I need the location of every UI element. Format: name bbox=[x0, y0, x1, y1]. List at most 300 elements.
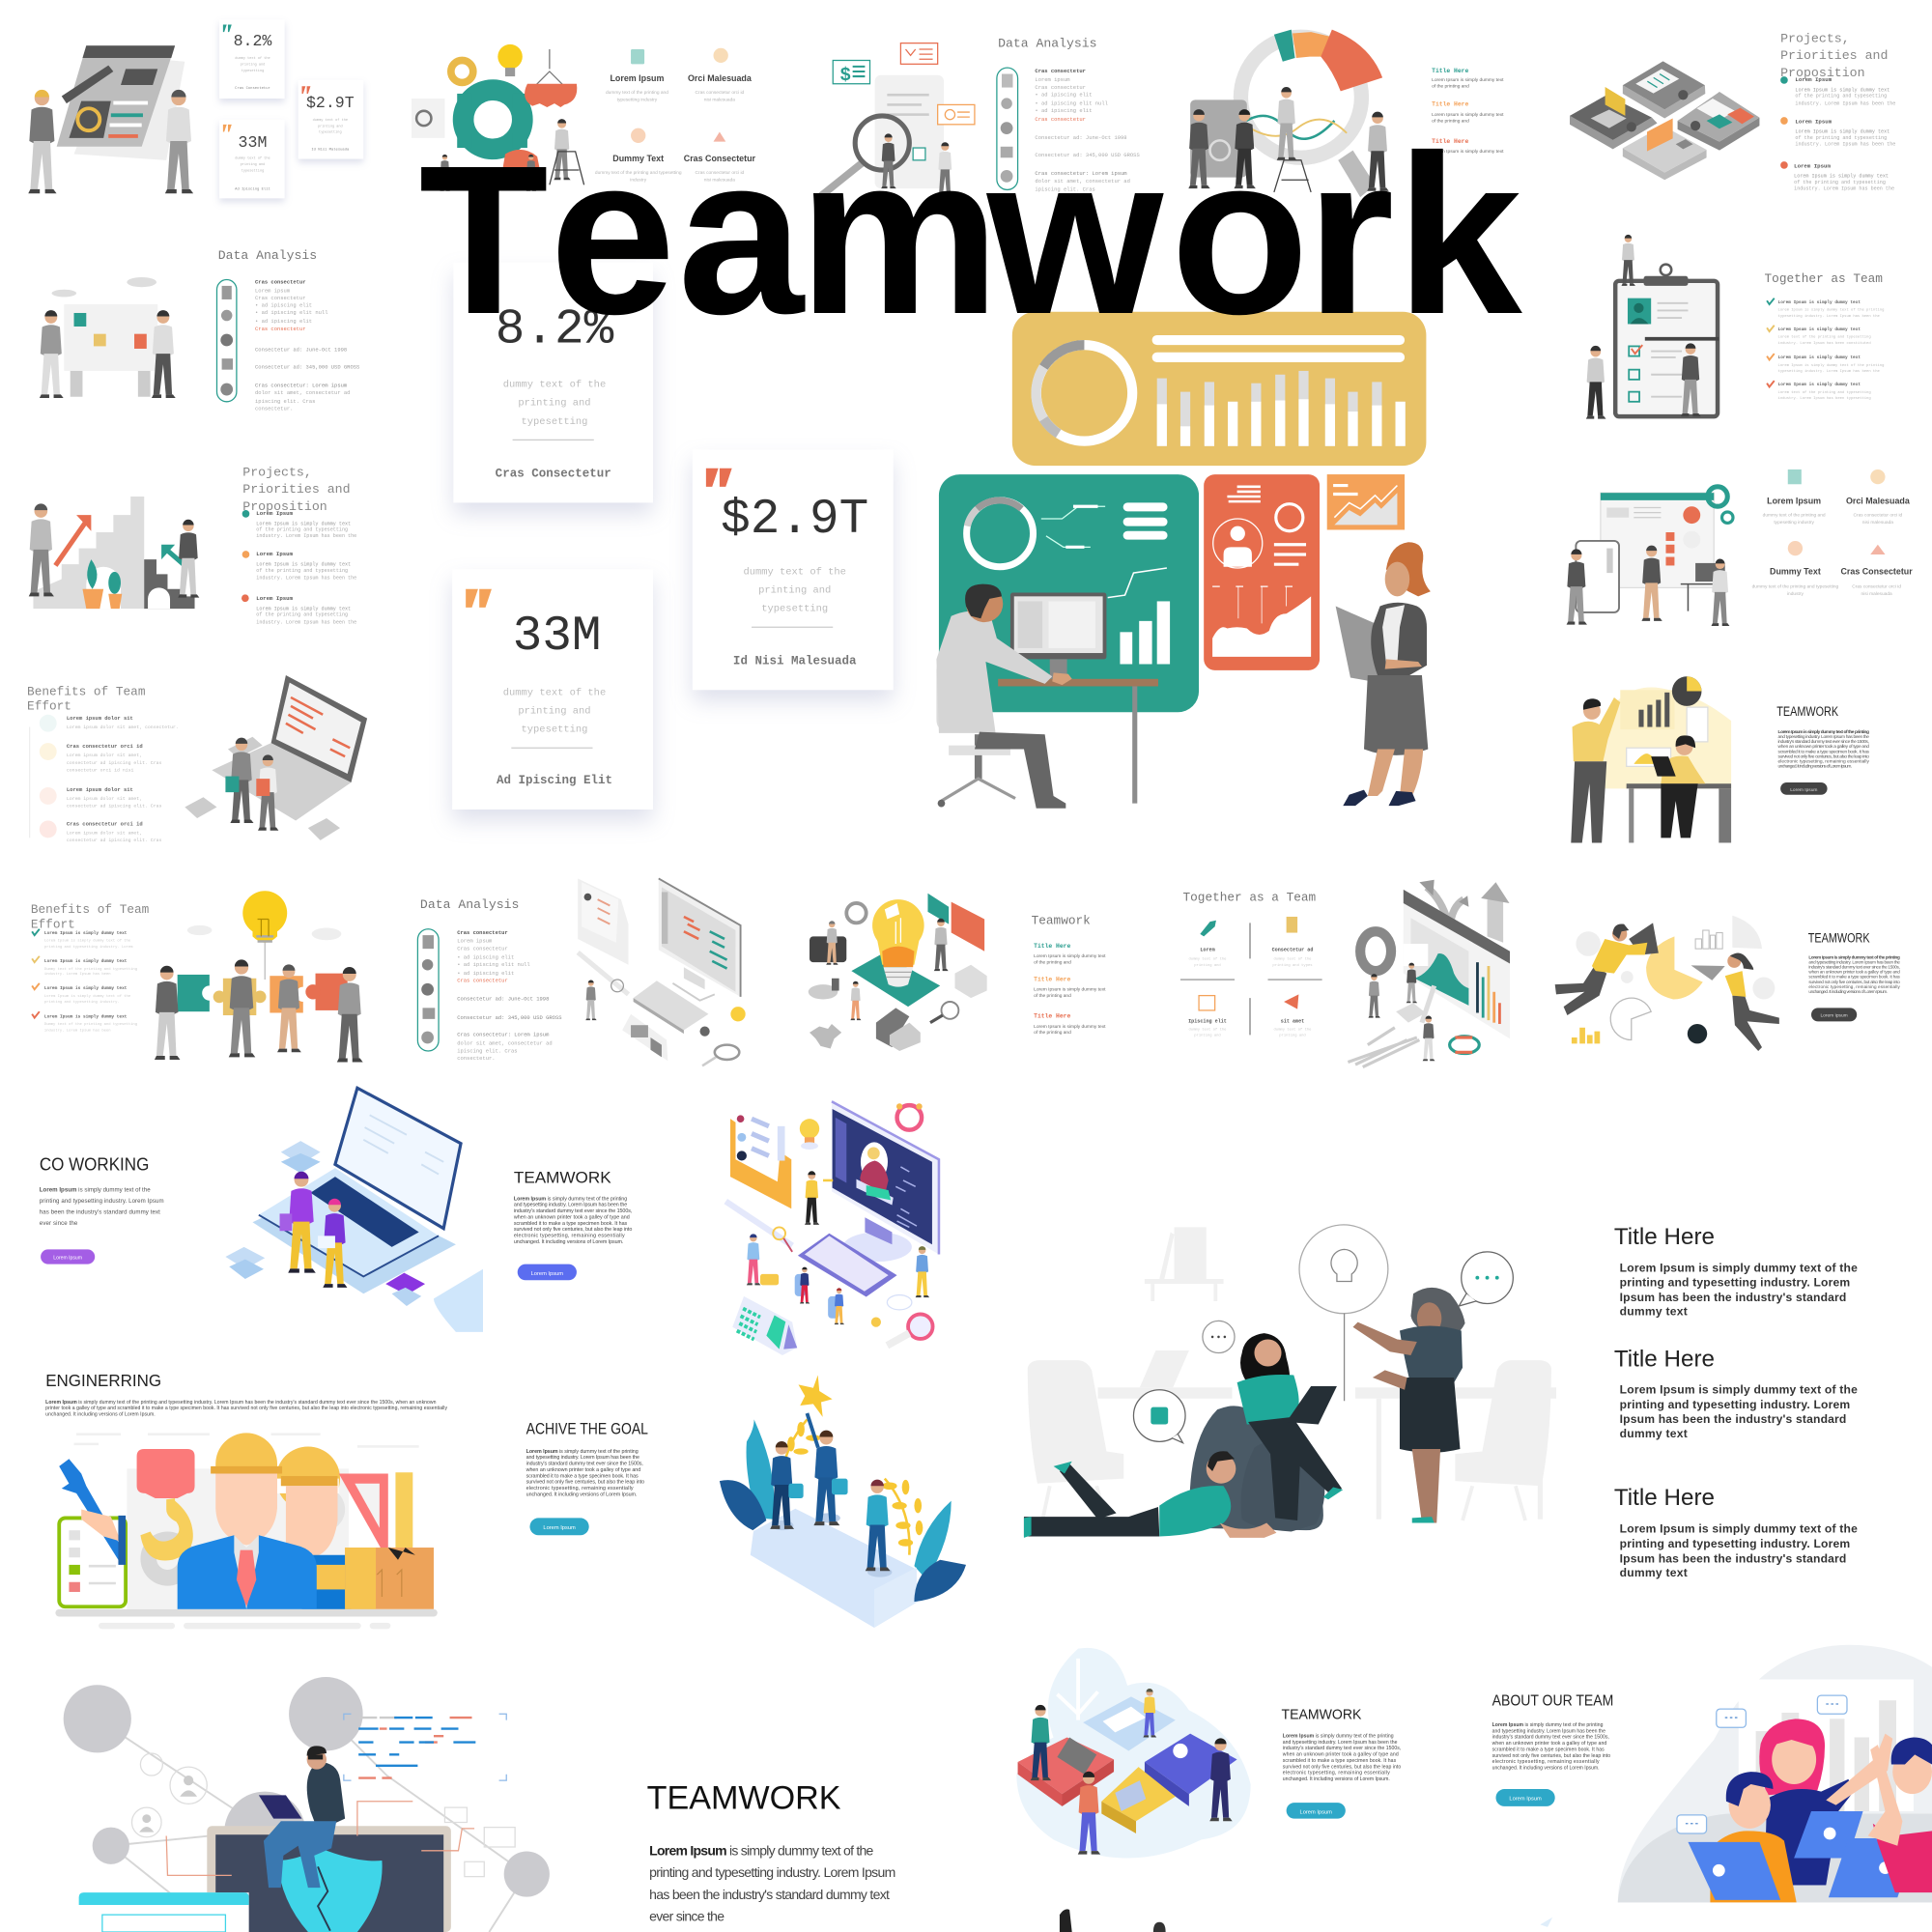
text block: when an unknown printer took a galley of type and bbox=[1778, 744, 1869, 750]
quadrant grid: Consectetur ad bbox=[1272, 948, 1313, 953]
text list bbox=[1035, 68, 1140, 193]
text list: Cras consectetur bbox=[457, 945, 508, 952]
body text: scrambled it to make a type specimen book. It has bbox=[1283, 1758, 1397, 1764]
feature icons and labels: dummy text of the printing and bbox=[606, 90, 668, 96]
feature icons and labels: Cras consectetur orci id bbox=[696, 170, 745, 176]
bottom edge figure fragments bbox=[1060, 1909, 1552, 1932]
note 2: Ipsum has been the industry's standard bbox=[1620, 1412, 1846, 1426]
text block: industry's standard dummy text ever since the 1500s, bbox=[1778, 739, 1869, 745]
body text: electronic typesetting, remaining essentially bbox=[1492, 1759, 1600, 1765]
text block: electronic typesetting, remaining essentially bbox=[1778, 759, 1870, 765]
heading: ACHIVE THE GOAL bbox=[526, 1420, 648, 1438]
figure: woman standing bbox=[1353, 1288, 1465, 1523]
three titled notes: Lorem Ipsum is simply dummy text bbox=[1432, 112, 1504, 118]
button bbox=[1780, 782, 1828, 795]
text block: Lorem Ipsum is simply dummy text of the printing bbox=[1808, 954, 1900, 959]
body text bbox=[1492, 1722, 1610, 1772]
body text: industry's standard dummy text ever since the 1500s, bbox=[1283, 1746, 1401, 1751]
bullets: Lorem Ipsum bbox=[1794, 162, 1831, 169]
figure: woman on beanbag bbox=[1189, 1333, 1343, 1531]
mini card $2.9T: $2.9T bbox=[306, 94, 355, 112]
panel: Achive the goal slide bbox=[526, 1420, 648, 1535]
note 1: Lorem Ipsum is simply dummy text of the bbox=[1620, 1261, 1858, 1274]
note 2 bbox=[1614, 1347, 1858, 1440]
checklist: Lorem text of the printing and typesetting bbox=[1778, 390, 1871, 395]
text block bbox=[1776, 704, 1870, 770]
illustration: puzzle team and bulb bbox=[155, 891, 363, 1062]
heading: TEAMWORK bbox=[1282, 1707, 1362, 1722]
panel: orange dashboard bbox=[1204, 474, 1320, 670]
value: 33M bbox=[513, 610, 601, 665]
checklist: typesetting industry. Lorem Ipsum has been the bbox=[1778, 369, 1881, 374]
title: Teamwork bbox=[419, 108, 1522, 361]
body text bbox=[649, 1842, 895, 1924]
heading: Proposition bbox=[242, 499, 327, 514]
value: 8.2% bbox=[496, 303, 614, 358]
description: typesetting bbox=[522, 724, 587, 736]
illustration: gears and bulb bbox=[412, 44, 584, 191]
heading: Data Analysis bbox=[420, 897, 519, 912]
mini card 33M: printing and bbox=[241, 162, 265, 167]
text block: Title Here bbox=[1034, 943, 1070, 950]
body text bbox=[513, 1196, 632, 1245]
body text: industry's standard dummy text ever since the 1500s, bbox=[526, 1462, 643, 1467]
item list: consectetur ad ipiscing elit. Cras bbox=[67, 760, 161, 766]
panel: main stat card $2.9T bbox=[693, 450, 894, 690]
checklist: industry. Lorem Ipsum has been constituted bbox=[1778, 341, 1871, 346]
illustration: engineers bbox=[55, 1433, 438, 1629]
checklist: Lorem Ipsum is simply dummy text of the printing bbox=[1778, 363, 1884, 368]
feature icons and labels: Cras Consectetur bbox=[684, 154, 756, 163]
panel: small orange chart bbox=[1327, 474, 1405, 529]
text list: • ad ipiscing elit null bbox=[1035, 99, 1108, 106]
item list: Cras consectetur orci id bbox=[67, 743, 143, 750]
quadrant grid bbox=[1180, 917, 1322, 1038]
panel: donut slide bbox=[1188, 30, 1504, 197]
text list: • ad ipiscing elit bbox=[457, 953, 514, 960]
illustration: flying people and charts bbox=[1555, 916, 1779, 1051]
text list: consectetur. bbox=[255, 406, 293, 412]
text list: • ad ipiscing elit bbox=[1035, 91, 1093, 98]
body text: electronic typesetting, remaining essentially bbox=[514, 1234, 625, 1239]
three titled notes: Lorem Ipsum is simply dummy text bbox=[1432, 77, 1504, 83]
feature icons and labels: Cras consectetur orci id bbox=[1852, 583, 1901, 589]
text list: Consectetur ad: June-Oct 1998 bbox=[457, 996, 549, 1003]
checklist: Lorem Ipsum is simply dummy text bbox=[44, 958, 128, 964]
note 3: dummy text bbox=[1620, 1566, 1688, 1579]
mini card 33M: typesetting bbox=[242, 168, 264, 173]
bullets bbox=[1780, 76, 1895, 191]
illustration: isometric laptop with people bbox=[225, 1088, 483, 1332]
quadrant grid: printing and bbox=[1279, 1034, 1306, 1038]
panel: Title Here text blocks bbox=[1614, 1224, 1858, 1579]
note 2: Lorem Ipsum is simply dummy text of the bbox=[1620, 1383, 1858, 1397]
mini card $2.9T: printing and bbox=[318, 124, 343, 128]
description: printing and bbox=[518, 398, 591, 410]
text list: Cras consectetur: Lorem ipsum bbox=[457, 1032, 549, 1038]
text block: survived not only five centuries, but also the leap into bbox=[1778, 753, 1869, 759]
illustration: man and woman at desk bbox=[1571, 676, 1731, 842]
body text: has been the industry's standard dummy text bbox=[649, 1887, 890, 1902]
speech bubble: small bbox=[1203, 1321, 1235, 1353]
bullets: Lorem Ipsum is simply dummy text bbox=[1795, 129, 1889, 135]
heading: Priorities and bbox=[1780, 48, 1888, 63]
body text: printing and typesetting industry. Lorem Ipsum bbox=[40, 1198, 164, 1205]
heading: Projects, bbox=[242, 465, 312, 479]
text block: Lorem Ipsum is simply dummy text of the printing bbox=[1778, 729, 1869, 735]
checklist: Lorem Ipsum is simply dummy text bbox=[44, 1014, 128, 1020]
speech bubble: right bbox=[1459, 1252, 1513, 1306]
heading: Together as a Team bbox=[1182, 890, 1316, 904]
checklist: Lorem Ipsum is simply dummy text bbox=[1778, 327, 1861, 332]
illustration: network and shield bbox=[64, 1677, 550, 1932]
text list: consectetur. bbox=[457, 1055, 496, 1062]
illustration: isometric laptop bbox=[185, 675, 367, 840]
feature icons and labels: Lorem Ipsum bbox=[1767, 497, 1821, 506]
feature icons and labels bbox=[1752, 469, 1913, 597]
description bbox=[503, 687, 606, 736]
bullets: of the printing and typesetting bbox=[1794, 180, 1886, 185]
item list: consectetur ad ipiscing elit. Cras bbox=[67, 838, 161, 843]
attribution: Id Nisi Malesuada bbox=[733, 654, 857, 668]
note 3: printing and typesetting industry. Lorem bbox=[1620, 1537, 1850, 1550]
body text: and typesetting industry. Lorem Ipsum has been the bbox=[526, 1455, 639, 1461]
panel: yellow teamwork slide bbox=[1571, 676, 1870, 842]
feature icons and labels: industry bbox=[1787, 591, 1804, 597]
bullets: industry. Lorem Ipsum has been the bbox=[1795, 100, 1895, 106]
body text: scrambled it to make a type specimen book. It has bbox=[1492, 1747, 1605, 1752]
text list: Cras consectetur: Lorem ipsum bbox=[255, 383, 347, 389]
body text: has been the industry's standard dummy text bbox=[40, 1208, 160, 1215]
checklist: Lorem Ipsum is simply dummy text of the bbox=[44, 994, 131, 999]
bullets: Lorem Ipsum bbox=[1795, 76, 1833, 83]
heading: Benefits of Team bbox=[27, 684, 145, 698]
heading: Benefits of Team bbox=[31, 902, 149, 917]
description: typesetting bbox=[522, 416, 587, 428]
mini card 33M: dummy text of the bbox=[235, 156, 270, 161]
body text: when an unknown printer took a galley of type and bbox=[526, 1467, 640, 1473]
button: Lorem Ipsum bbox=[531, 1271, 563, 1277]
text block: of the printing and bbox=[1034, 959, 1071, 965]
text list: dolor sit amet, consectetur ad bbox=[1035, 178, 1130, 185]
button: Lorem Ipsum bbox=[1790, 787, 1817, 793]
quadrant grid: dummy text of the bbox=[1189, 1027, 1227, 1032]
text block: Lorem Ipsum is simply dummy text bbox=[1034, 953, 1106, 959]
text block bbox=[1808, 931, 1901, 994]
item list: Lorem ipsum dolor sit bbox=[67, 715, 133, 722]
text block: and typesetting industry. Lorem Ipsum has been the bbox=[1808, 959, 1900, 964]
attribution: Ad Ipiscing Elit bbox=[497, 774, 612, 787]
text list: Cras consectetur bbox=[255, 278, 306, 285]
text block: Title Here bbox=[1034, 1013, 1070, 1020]
body text bbox=[1283, 1733, 1401, 1782]
heading: Together as Team bbox=[1765, 271, 1883, 286]
note 3: Ipsum has been the industry's standard bbox=[1620, 1551, 1846, 1565]
description: printing and bbox=[758, 585, 831, 597]
text list: Cras consectetur bbox=[1035, 68, 1086, 74]
feature icons and labels: nisi malesuada bbox=[1862, 520, 1893, 526]
body text: Lorem Ipsum is simply dummy text of the printing and typesetting industry. Lorem Ipsum has been the industry's standard dummy text ever since the 1500s, when an unknown bbox=[45, 1400, 437, 1406]
text list: Consectetur ad: 345,000 USD GROSS bbox=[457, 1014, 562, 1021]
body text: unchanged. It including versions of Lorem Ipsum. bbox=[526, 1492, 637, 1497]
checklist: industry. Lorem Ipsum has been bbox=[44, 972, 111, 977]
feature icons and labels: Cras consectetur orci id bbox=[1854, 512, 1903, 518]
item list: Cras consectetur orci id bbox=[67, 821, 143, 828]
body text: survived not only five centuries, but also the leap into bbox=[526, 1480, 644, 1486]
panel: product slide (right) bbox=[1567, 469, 1913, 626]
illustration: team at board bbox=[40, 277, 176, 398]
text list: Lorem ipsum bbox=[1035, 76, 1070, 83]
checklist: Lorem Ipsum is simply dummy text bbox=[1778, 355, 1861, 360]
panel: clipboard slide bbox=[1586, 235, 1884, 419]
bullets: Lorem Ipsum is simply dummy text bbox=[1795, 87, 1889, 93]
mini card 8.2%: 8.2% bbox=[234, 32, 271, 50]
panel: gears slide bbox=[412, 44, 756, 191]
text block: TEAMWORK bbox=[1776, 704, 1838, 719]
central dashboard illustration bbox=[936, 312, 1431, 809]
text list: Consectetur ad: June-Oct 1998 bbox=[1035, 134, 1127, 141]
mini card $2.9T: dummy text of the bbox=[313, 118, 348, 123]
button: Lorem Ipsum bbox=[53, 1256, 82, 1262]
body text: electronic typesetting, remaining essentially bbox=[526, 1486, 634, 1492]
checklist: printing and typesetting industry. Lorem bbox=[44, 945, 133, 950]
illustration: document and magnifier: $ bbox=[840, 65, 851, 85]
bullets: Lorem Ipsum bbox=[256, 551, 294, 557]
body text: when an unknown printer took a galley of type and bbox=[513, 1214, 630, 1220]
button: Lorem Ipsum bbox=[1300, 1810, 1332, 1816]
text block: of the printing and bbox=[1034, 1030, 1071, 1036]
feature icons and labels: Cras Consectetur bbox=[1840, 566, 1913, 576]
illustration: team reaching star bbox=[720, 1375, 966, 1628]
panel: Together as a Team slide bbox=[1180, 880, 1510, 1067]
card background bbox=[693, 450, 894, 690]
quadrant grid: sit amet bbox=[1281, 1019, 1304, 1025]
text list: Cras consectetur bbox=[457, 929, 508, 936]
capsule icon strip bbox=[997, 68, 1018, 189]
illustration: web window and team bbox=[1567, 487, 1733, 626]
item list bbox=[30, 715, 179, 843]
quadrant grid: dummy text of the bbox=[1189, 957, 1227, 962]
bullets: of the printing and typesetting bbox=[256, 568, 348, 574]
text block: TEAMWORK bbox=[1808, 931, 1870, 946]
feature icons and labels: nisi malesuada bbox=[1861, 591, 1892, 597]
standing woman figure bbox=[1336, 542, 1431, 806]
button: Lorem Ipsum bbox=[543, 1525, 576, 1531]
icon: quote marks bbox=[466, 589, 492, 608]
body text: scrambled it to make a type specimen book. It has bbox=[514, 1221, 628, 1227]
bullets: Lorem Ipsum is simply dummy text bbox=[256, 521, 351, 526]
illustration: clipboard and people bbox=[1586, 235, 1719, 419]
item list: Lorem ipsum dolor sit amet, consectetur. bbox=[67, 724, 179, 730]
illustration: stairs and arrows bbox=[29, 497, 199, 609]
icon: quote marks bbox=[706, 469, 732, 487]
body text: scrambled it to make a type specimen book. It has bbox=[526, 1473, 639, 1479]
divider bbox=[752, 626, 833, 628]
text list: • ad ipiscing elit bbox=[255, 318, 312, 325]
heading: TEAMWORK bbox=[514, 1168, 611, 1186]
description bbox=[743, 566, 846, 615]
body text: industry's standard dummy text ever since the 1500s, bbox=[514, 1208, 632, 1214]
description: dummy text of the bbox=[503, 380, 606, 391]
feature icons and labels: dummy text of the printing and bbox=[1763, 512, 1826, 518]
value: $2.9T bbox=[721, 493, 868, 548]
note 2: Title Here bbox=[1614, 1347, 1715, 1373]
text list bbox=[255, 278, 360, 412]
text list: • ad ipiscing elit null bbox=[457, 961, 530, 968]
body text: when an unknown printer took a galley of type and bbox=[1492, 1741, 1606, 1747]
feature icons and labels: dummy text of the printing and typesetting bbox=[1752, 583, 1839, 589]
text list: Cras consectetur bbox=[1035, 116, 1086, 123]
text block: of the printing and bbox=[1034, 993, 1071, 999]
feature icons and labels: Orci Malesuada bbox=[688, 73, 753, 83]
text block bbox=[1032, 914, 1106, 1036]
panel: main stat card 33M bbox=[452, 569, 653, 810]
body text: Lorem Ipsum is simply dummy text of the printing bbox=[514, 1196, 627, 1202]
text block: unchanged. It including versions of Lorem Ipsum. bbox=[1808, 989, 1888, 994]
panel: flying people slide bbox=[1555, 916, 1901, 1051]
panel: top-left stat cards slide bbox=[28, 19, 363, 198]
bullets: industry. Lorem Ipsum has been the bbox=[256, 533, 356, 539]
three titled notes bbox=[1432, 68, 1504, 155]
illustration: donut chart with team bbox=[1188, 30, 1389, 197]
bullets: of the printing and typesetting bbox=[1795, 94, 1887, 99]
checklist: printing and typesetting industry. bbox=[44, 1000, 120, 1005]
text list: Lorem ipsum bbox=[255, 287, 290, 294]
feature icons and labels: Dummy Text bbox=[612, 154, 664, 163]
description: typesetting bbox=[761, 604, 828, 615]
note 1 bbox=[1614, 1224, 1858, 1319]
checklist: industry. Lorem Ipsum has been bbox=[44, 1029, 111, 1034]
bullets: industry. Lorem Ipsum has been the bbox=[256, 619, 356, 625]
mini card $2.9T: Id Nisi Malesuada bbox=[311, 148, 350, 153]
figure: man lying on floor bbox=[1024, 1451, 1276, 1538]
illustration: people at dashboard bbox=[28, 45, 193, 193]
body text: printer took a galley of type and scrambled it to make a type specimen book. It has survived not only five centuries, but also the leap into electronic typesetting, remaining essentially bbox=[45, 1406, 447, 1411]
illustration: isometric puzzle bbox=[1570, 61, 1759, 180]
body text bbox=[526, 1449, 644, 1497]
panel: Benefits puzzle slide bbox=[31, 891, 363, 1062]
capsule icon strip bbox=[417, 929, 439, 1051]
attribution: Cras Consectetur bbox=[496, 468, 611, 481]
text block: survived not only five centuries, but also the leap into bbox=[1808, 980, 1900, 984]
checklist: Lorem text of the printing and typesetting bbox=[1778, 334, 1871, 339]
quadrant grid: dummy text of the bbox=[1274, 957, 1312, 962]
mini card 33M bbox=[219, 120, 285, 198]
body text: Lorem Ipsum is simply dummy text of the bbox=[649, 1842, 874, 1858]
item list: Lorem ipsum dolor sit amet, bbox=[67, 753, 142, 758]
thought bubble: bulb bbox=[1299, 1225, 1388, 1401]
body text bbox=[45, 1400, 447, 1418]
text block: Title Here bbox=[1034, 976, 1070, 982]
panel: Data Analysis slide (left) bbox=[40, 248, 360, 412]
mini card 8.2% bbox=[219, 19, 285, 99]
checklist: Lorem Ipsum is simply dummy text of the printing bbox=[1778, 307, 1884, 312]
illustration: bulb on platform bbox=[809, 894, 987, 1051]
text list: Cras consectetur bbox=[255, 295, 306, 301]
three titled notes: Title Here bbox=[1432, 138, 1468, 145]
feature icons and labels: Lorem Ipsum bbox=[610, 73, 664, 83]
heading: Proposition bbox=[1780, 66, 1865, 80]
text list: dolor sit amet, consectetur ad bbox=[255, 389, 350, 396]
text list: ipiscing elit. Cras bbox=[255, 398, 315, 405]
text list: • ad ipiscing elit null bbox=[255, 309, 328, 316]
illustration: document and magnifier bbox=[819, 43, 975, 197]
feature icons and labels: typesetting industry bbox=[1774, 520, 1815, 526]
text list: • ad ipiscing elit bbox=[255, 302, 312, 309]
text block: scrambled it to make a type specimen book. It has bbox=[1808, 975, 1901, 980]
panel: yellow dashboard bbox=[1012, 312, 1426, 466]
text block: and typesetting industry. Lorem Ipsum has been the bbox=[1778, 734, 1869, 740]
text list: ipiscing elit. Cras bbox=[457, 1047, 518, 1054]
text list: • ad ipiscing elit bbox=[1035, 107, 1093, 114]
text list: Lorem ipsum bbox=[457, 938, 492, 945]
checklist: Lorem Ipsum is simply dummy text bbox=[1778, 382, 1861, 387]
bullets: of the printing and typesetting bbox=[256, 612, 348, 618]
quadrant grid: printing and types bbox=[1272, 963, 1313, 968]
feature icons and labels: nisi malesuada bbox=[704, 98, 735, 103]
mini card $2.9T bbox=[298, 80, 363, 159]
heading: Data Analysis bbox=[998, 36, 1097, 50]
feature icons and labels: nisi malesuada bbox=[704, 177, 735, 183]
checklist: Dummy text of the printing and typesetting bbox=[44, 1022, 137, 1027]
panel: Co Working slide bbox=[40, 1088, 483, 1332]
button bbox=[1811, 1008, 1857, 1021]
text list: ipiscing elit. Cras bbox=[1035, 186, 1095, 193]
panel: blue Teamwork slide (bottom) bbox=[1282, 1707, 1401, 1819]
feature icons and labels: Orci Malesuada bbox=[1846, 497, 1911, 506]
panel: blue Teamwork slide bbox=[513, 1168, 632, 1280]
panel: Enginerring slide bbox=[45, 1371, 447, 1629]
panel: main stat card 8.2% bbox=[453, 263, 653, 502]
text list: dolor sit amet, consectetur ad bbox=[457, 1040, 553, 1047]
three titled notes: of the printing and bbox=[1432, 118, 1469, 124]
card background bbox=[453, 263, 653, 502]
note 1: dummy text bbox=[1620, 1305, 1688, 1319]
illustration: isometric workstation bbox=[578, 878, 746, 1065]
text block: when an unknown printer took a galley of type and bbox=[1808, 970, 1900, 975]
text block: scrambled it to make a type specimen book. It has bbox=[1778, 749, 1870, 754]
panel: projects slide (top right) bbox=[1570, 31, 1895, 191]
body text: unchanged. It including versions of Lorem Ipsum. bbox=[45, 1412, 156, 1418]
checklist: industry. Lorem Ipsum has been typesetting bbox=[1778, 396, 1871, 401]
feature icons and labels: typesetting industry bbox=[617, 98, 658, 103]
button: Lorem Ipsum bbox=[1509, 1797, 1542, 1803]
capsule icon strip bbox=[216, 280, 237, 402]
illustration: isometric monitor and team bbox=[725, 1101, 939, 1355]
text block: Lorem Ipsum is simply dummy text bbox=[1034, 1024, 1106, 1030]
text list: Cras consectetur: Lorem ipsum bbox=[1035, 170, 1127, 177]
body text: unchanged. It including versions of Lorem Ipsum. bbox=[1492, 1766, 1600, 1772]
checklist: Lorem Ipsum is simply dummy text bbox=[1778, 299, 1861, 305]
note 3 bbox=[1614, 1485, 1858, 1579]
bullets: industry. Lorem Ipsum has been the bbox=[1794, 185, 1894, 191]
checklist: Lorem Ipsum is simply dummy text bbox=[44, 985, 128, 991]
body text: and typesetting industry. Lorem Ipsum has been the bbox=[1492, 1728, 1605, 1734]
text list: • ad ipiscing elit bbox=[457, 970, 514, 977]
bullets: Lorem Ipsum is simply dummy text bbox=[256, 561, 351, 567]
body text: industry's standard dummy text ever since the 1500s, bbox=[1492, 1735, 1609, 1741]
description: dummy text of the bbox=[743, 566, 846, 578]
note 1: Title Here bbox=[1614, 1224, 1715, 1250]
body text: and typesetting industry. Lorem Ipsum has been the bbox=[514, 1203, 627, 1208]
checklist: Lorem Ipsum is simply dummy text of the bbox=[44, 938, 131, 943]
quadrant grid: printing and bbox=[1194, 1034, 1221, 1038]
description: dummy text of the bbox=[503, 687, 606, 698]
mini card $2.9T: typesetting bbox=[319, 130, 342, 135]
button bbox=[41, 1249, 95, 1264]
checklist bbox=[32, 929, 137, 1034]
bullets: Lorem Ipsum is simply dummy text bbox=[1794, 174, 1889, 180]
